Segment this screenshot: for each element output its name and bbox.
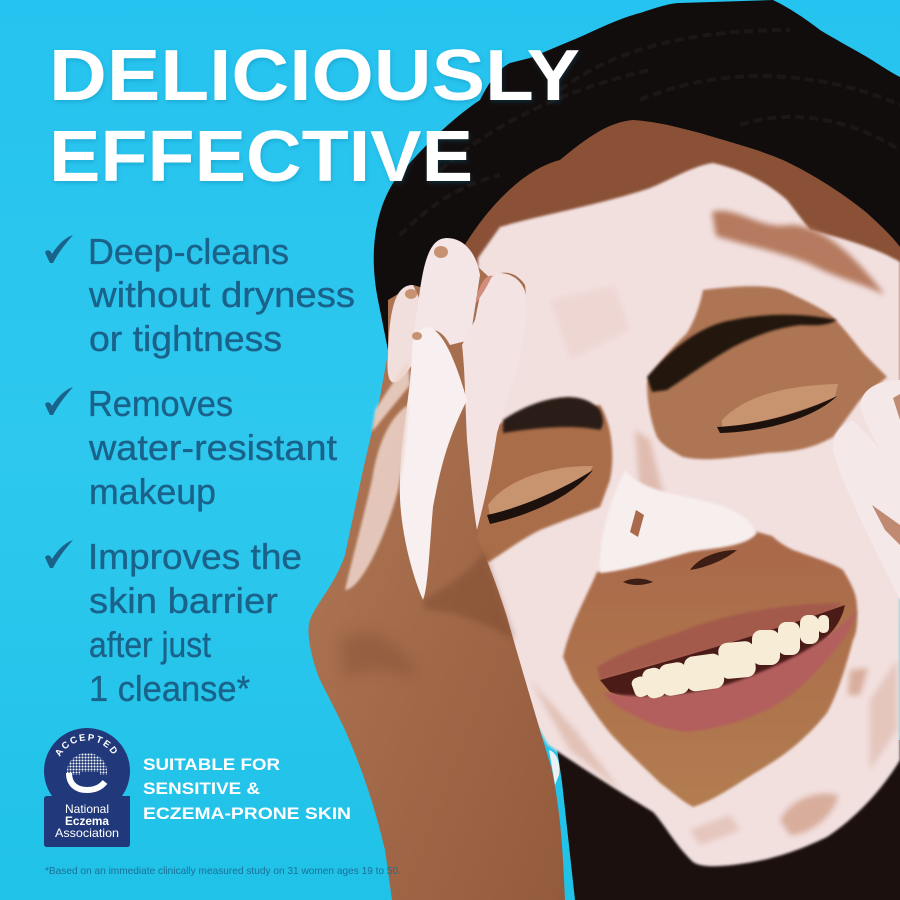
foam streaks on the back of the hand [345,360,410,590]
badge: National Eczema Association: ACCEPTED [56,734,117,757]
mouth interior [600,605,845,698]
right eyelid highlight [722,384,838,427]
benefit: removes makeup: water-resistant [88,427,337,468]
foam on pinky [387,285,420,382]
benefit: deep-cleans: or tightness [89,318,282,359]
footnote: *Based on an immediate clinically measured study on 31 women ages 19 to 50. [45,865,401,877]
finger crease shadow [423,550,515,640]
suitability statement [143,755,351,823]
stippled e mark [67,753,107,790]
suitability statement: SENSITIVE & [143,779,260,798]
check mark [45,540,73,568]
benefit: skin barrier: Improves the [88,536,302,577]
forehead skin [455,120,900,420]
left eye skin [470,405,612,563]
mouth surround skin [563,530,857,807]
benefit: removes makeup: Removes [88,383,233,424]
left eyebrow [503,397,603,433]
benefit: skin barrier: 1 cleanse* [89,668,250,709]
benefit: deep-cleans: without dryness [88,274,355,315]
foam on index finger [400,327,467,600]
benefit: skin barrier [45,536,302,709]
badge: National Eczema Association: Eczema [65,814,109,828]
foam mask [478,163,900,866]
upper lip [597,603,843,680]
benefit: deep-cleans: Deep-cleans [88,231,289,272]
right eyebrow [647,315,837,392]
badge: National Eczema Association: Association [55,826,119,840]
benefit: skin barrier: after just [89,624,211,665]
hand and wrist [308,238,565,900]
benefit: removes makeup [45,383,337,512]
suitability statement: SUITABLE FOR [143,755,280,774]
association name: National [65,802,109,816]
benefit: removes makeup: makeup [89,471,216,512]
hair braid texture [400,30,900,235]
lower foam pink patches [530,430,897,845]
hair [374,0,900,360]
check mark [45,387,73,415]
nose bridge brown streak [630,510,644,537]
accepted arc text [60,741,114,757]
fingernails [405,246,492,340]
right eye lashes [717,396,837,433]
foam over the nose [600,470,757,573]
benefit: skin barrier: skin barrier [89,580,278,621]
right eye skin [647,286,887,459]
left eyelid highlight [488,466,593,516]
teeth [630,615,829,700]
forehead pink foam patches [550,211,885,360]
photo: woman with foam cleanser on her face [308,0,900,900]
nostrils [623,550,737,585]
badge body [44,796,130,847]
neck and shadow below the chin [556,740,900,900]
benefit: deep-cleans [45,231,355,359]
small foam blob at the wrist [549,750,559,785]
title [49,36,580,197]
title: DELICIOUSLY [49,36,580,116]
title: EFFECTIVE [49,117,473,197]
right hand fingers [833,380,900,600]
knuckle shadow [340,632,420,680]
foam on middle finger [462,273,527,530]
check mark [45,235,73,263]
foam on ring finger [412,238,480,345]
suitability statement: ECZEMA-PRONE SKIN [143,804,351,823]
lower lip [603,610,857,732]
left eye lashes [487,470,593,524]
badge: National Eczema Association [44,728,130,847]
